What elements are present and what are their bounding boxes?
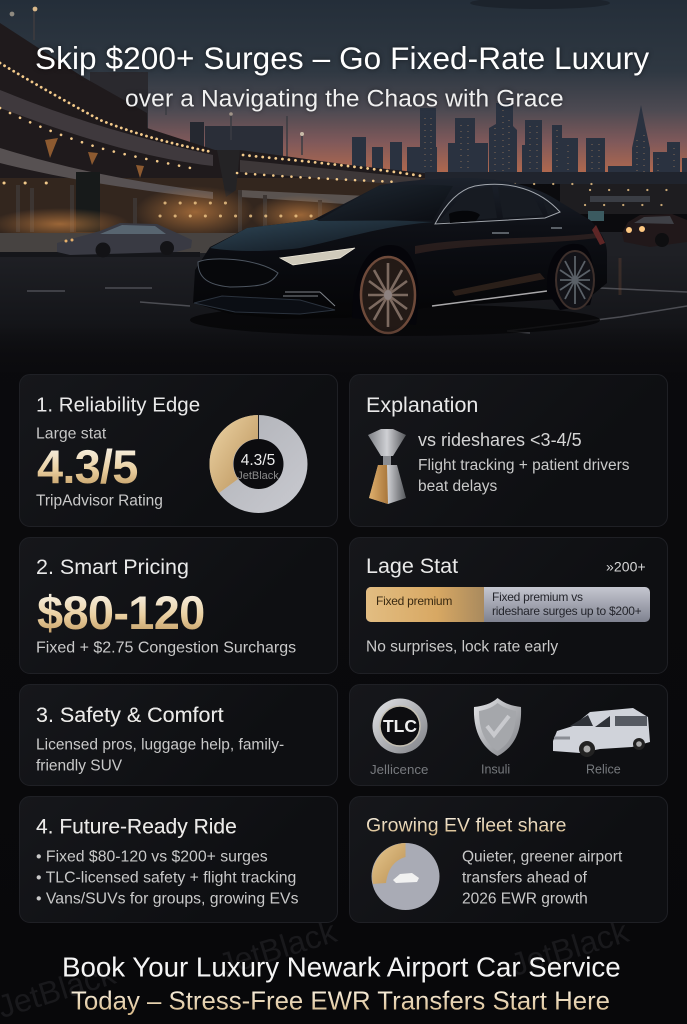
mid-distance buildings and lamp posts [10,7,304,158]
donut chart: 4.3/5 rating: JetBlack [237,470,279,482]
watermarks [0,913,632,1024]
donut chart: 4.3/5 rating: 4.3/5 [241,452,275,469]
ground [0,232,687,372]
stat: 4.3/5: 4.3/5 [37,440,138,493]
bar segment: fixed premium [366,587,484,622]
heading: future-ready ride: 4. Future-Ready Ride [36,815,237,838]
panel: explanation [349,374,668,527]
heading: lage stat: Lage Stat [366,554,458,578]
call to action line 1: Book Your Luxury Newark Airport Car Service [62,951,621,982]
text: EV body [462,848,622,908]
label: jellicence: Jellicence [370,762,428,777]
heading: safety and comfort: 3. Safety & Comfort [36,703,224,727]
label: relice: Relice [586,762,621,776]
text: safety body: friendly SUV [36,757,122,774]
car: distant sedan right [588,211,687,247]
panel: reliability edge [19,374,338,527]
label: tripadvisor rating: TripAdvisor Rating [36,493,163,510]
sky [0,0,687,178]
car: black luxury sedan [190,178,607,336]
mirror [449,211,480,223]
icon: TLC badge: TLC [383,716,417,736]
icon: shield [474,698,522,756]
panel: badges [349,684,668,786]
heading: reliability edge: 1. Reliability Edge [36,394,200,417]
text: explanation body: Flight tracking + patient drivers [418,457,630,474]
panel: large stat comparison [349,537,668,674]
text: EV body: transfers ahead of [462,870,587,886]
text: rideshare comparison: vs rideshares <3-4/5 [418,430,582,450]
text: EV body: Quieter, greener airport [462,848,622,866]
car: parked sedan left [57,223,192,258]
text: safety body [36,736,284,774]
text: safety body: Licensed pros, luggage help, family- [36,736,284,754]
bar segment: fixed premium: Fixed premium [376,594,452,608]
list: benefits: • Vans/SUVs for groups, growing EVs [36,890,298,908]
icon: trophy [368,429,406,504]
heading: explanation: Explanation [366,393,478,417]
text: EV body: 2026 EWR growth [462,890,588,908]
body reflections [415,233,598,254]
label: insuli: Insuli [481,762,510,776]
stat: price: $80-120 [37,586,205,639]
text: explanation body: beat delays [418,478,497,495]
icon: white van [553,708,650,757]
terminal light strings [0,63,680,216]
text: pricing note: Fixed + $2.75 Congestion Surchargs [36,639,296,656]
side windows [437,186,558,223]
city skyline [352,103,687,177]
watermarks: JetBlack [506,913,632,983]
text: explanation body [418,457,630,495]
bar segment: rideshare surges [492,590,642,618]
headlight [280,248,355,265]
call to action line 2: Today – Stress-Free EWR Transfers Start Here [71,988,610,1016]
list: benefits: • Fixed $80-120 vs $200+ surges [36,848,268,866]
panel: EV fleet [349,796,668,923]
donut chart: 4.3/5 rating [210,415,308,513]
front wheel [352,245,419,333]
title: Skip $200+ Surges – Go Fixed-Rate Luxury [35,40,649,76]
subtitle: over a Navigating the Chaos with Grace [125,85,564,112]
panel: safety and comfort [19,684,338,786]
label: 200+: »200+ [606,559,646,575]
rear wheel [547,244,594,310]
chart: EV share pie [372,843,440,910]
bar segment: rideshare surges: rideshare surges up to $200+ [492,604,641,618]
bottom fade [0,325,687,372]
watermarks: JetBlack [214,913,340,983]
hero scene: night airport with black sedan [0,0,687,334]
list: benefits: • TLC-licensed safety + flight tracking [36,870,296,886]
airport terminal [0,23,687,240]
skyline windows [425,110,674,172]
grille [198,259,278,287]
comparison bar [366,587,650,622]
heading: EV fleet share: Growing EV fleet share [366,814,567,836]
bar segment: rideshare surges: Fixed premium vs [492,590,583,604]
panel: smart pricing [19,537,338,674]
heading: smart pricing: 2. Smart Pricing [36,555,189,579]
windshield [317,185,453,221]
label: large stat: Large stat [36,426,106,443]
panel: future-ready ride [19,796,338,923]
icon: TLC badge [372,698,428,754]
list: benefits [36,848,298,908]
text: no surprises: No surprises, lock rate early [366,639,558,656]
